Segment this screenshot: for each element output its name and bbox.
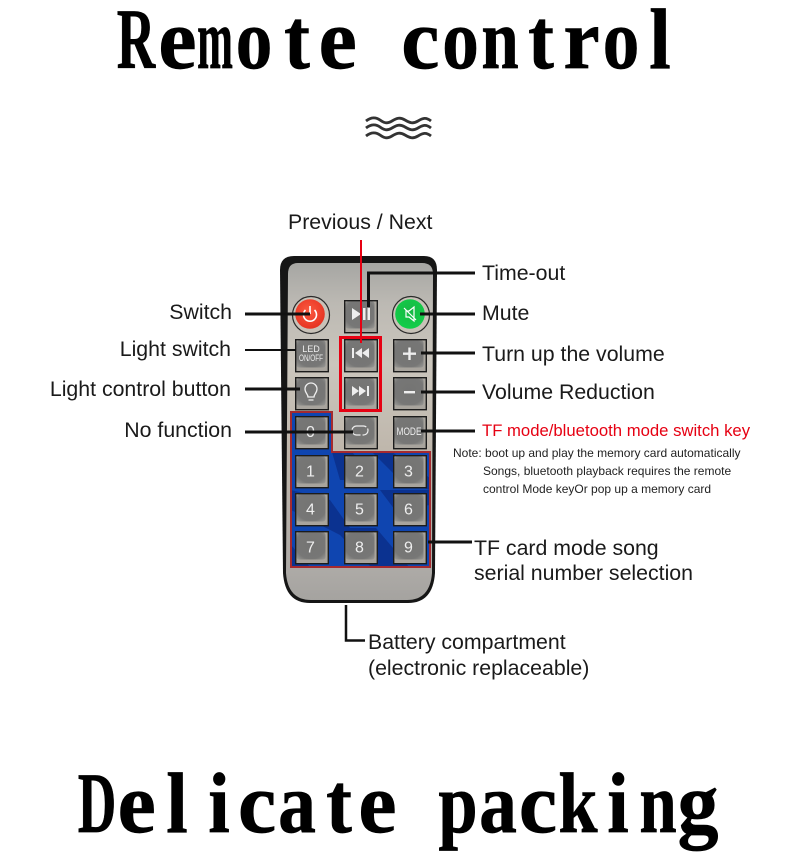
play/pause key — [345, 301, 377, 333]
label: Light control button: Light control button — [50, 377, 231, 401]
label: Mute: Mute — [482, 301, 529, 325]
power button — [292, 296, 330, 334]
icon: triple wave divider — [366, 118, 431, 138]
previous key — [345, 340, 377, 372]
mode key — [394, 417, 426, 449]
title: Delicate packing: p — [438, 755, 477, 851]
title: Delicate packing: l — [166, 755, 188, 851]
LED on/off key — [296, 340, 328, 372]
plus key — [394, 340, 426, 372]
note text: control Mode keyOr pop up a memory card — [483, 482, 711, 496]
title: Delicate packing: e — [118, 755, 156, 851]
number keys 1 to 9: 7 — [306, 540, 315, 556]
label: TF card mode song serial number selection: TF card mode song — [474, 536, 659, 560]
number keys 1 to 9 — [296, 456, 426, 564]
leader lines — [245, 273, 475, 640]
number keys 1 to 9: 9 — [404, 540, 413, 556]
label: Time-out: Time-out — [482, 261, 565, 285]
title: Delicate packing — [77, 755, 719, 852]
label: Turn up the volume: Turn up the volume — [482, 342, 665, 366]
title: Delicate packing: i — [208, 755, 230, 851]
number keys 1 to 9: 2 — [355, 464, 364, 480]
label: Battery compartment: (electronic replaceable) — [368, 656, 589, 680]
number keys 1 to 9: 8 — [355, 540, 364, 556]
note text: Songs, bluetooth playback requires the remote — [483, 464, 731, 478]
next key — [345, 378, 377, 410]
LED on/off key: ON/OFF — [299, 353, 323, 363]
title: Delicate packing: a — [479, 755, 517, 851]
label: Battery compartment — [368, 630, 589, 680]
number keys 1 to 9: 5 — [355, 502, 364, 518]
title: Remote control — [117, 0, 671, 87]
label: Switch: Switch — [169, 300, 232, 324]
number keys 1 to 9: 3 — [404, 464, 413, 480]
title: Delicate packing: e — [358, 755, 397, 851]
note text: Note: boot up and play the memory card automatically — [453, 446, 740, 460]
label: Light switch: Light switch — [120, 337, 231, 361]
title: Delicate packing: a — [278, 755, 316, 851]
label: Previous / Next: Previous / Next — [288, 210, 432, 234]
title: Delicate packing: t — [326, 755, 352, 851]
title: Delicate packing: c — [238, 755, 276, 851]
label: TF card mode song serial number selection: serial number selection — [474, 561, 693, 585]
title: Delicate packing: D — [77, 755, 116, 851]
red highlight around previous and next keys — [340, 338, 380, 410]
number keys 1 to 9: 4 — [306, 502, 315, 518]
repeat key — [345, 417, 377, 449]
zero key — [296, 417, 328, 449]
label: TF mode/bluetooth mode switch key: TF mode/bluetooth mode switch key — [482, 421, 751, 440]
remote control body — [280, 256, 437, 603]
title: Delicate packing: i — [607, 755, 629, 851]
minus key — [394, 378, 426, 410]
light bulb key — [296, 378, 328, 410]
LED on/off key: LED — [302, 344, 320, 354]
number keys 1 to 9: 6 — [404, 502, 413, 518]
label: Battery compartment: Battery compartment — [368, 630, 566, 654]
mode key: MODE — [396, 426, 422, 438]
title: Delicate packing: g — [678, 755, 719, 851]
title: Delicate packing: c — [519, 755, 557, 851]
number keys 1 to 9: 1 — [306, 464, 315, 480]
mute button — [392, 296, 430, 334]
label: No function: No function — [124, 418, 232, 442]
zero key: 0 — [306, 424, 315, 441]
label: Volume Reduction: Volume Reduction — [482, 380, 655, 404]
blue number panel — [291, 412, 430, 568]
title: Delicate packing: k — [558, 755, 598, 851]
title: Delicate packing: n — [640, 755, 677, 851]
body shell — [280, 256, 437, 603]
note text — [453, 446, 740, 496]
red leader line — [360, 240, 362, 343]
label: TF card mode song serial number selection — [474, 536, 693, 585]
